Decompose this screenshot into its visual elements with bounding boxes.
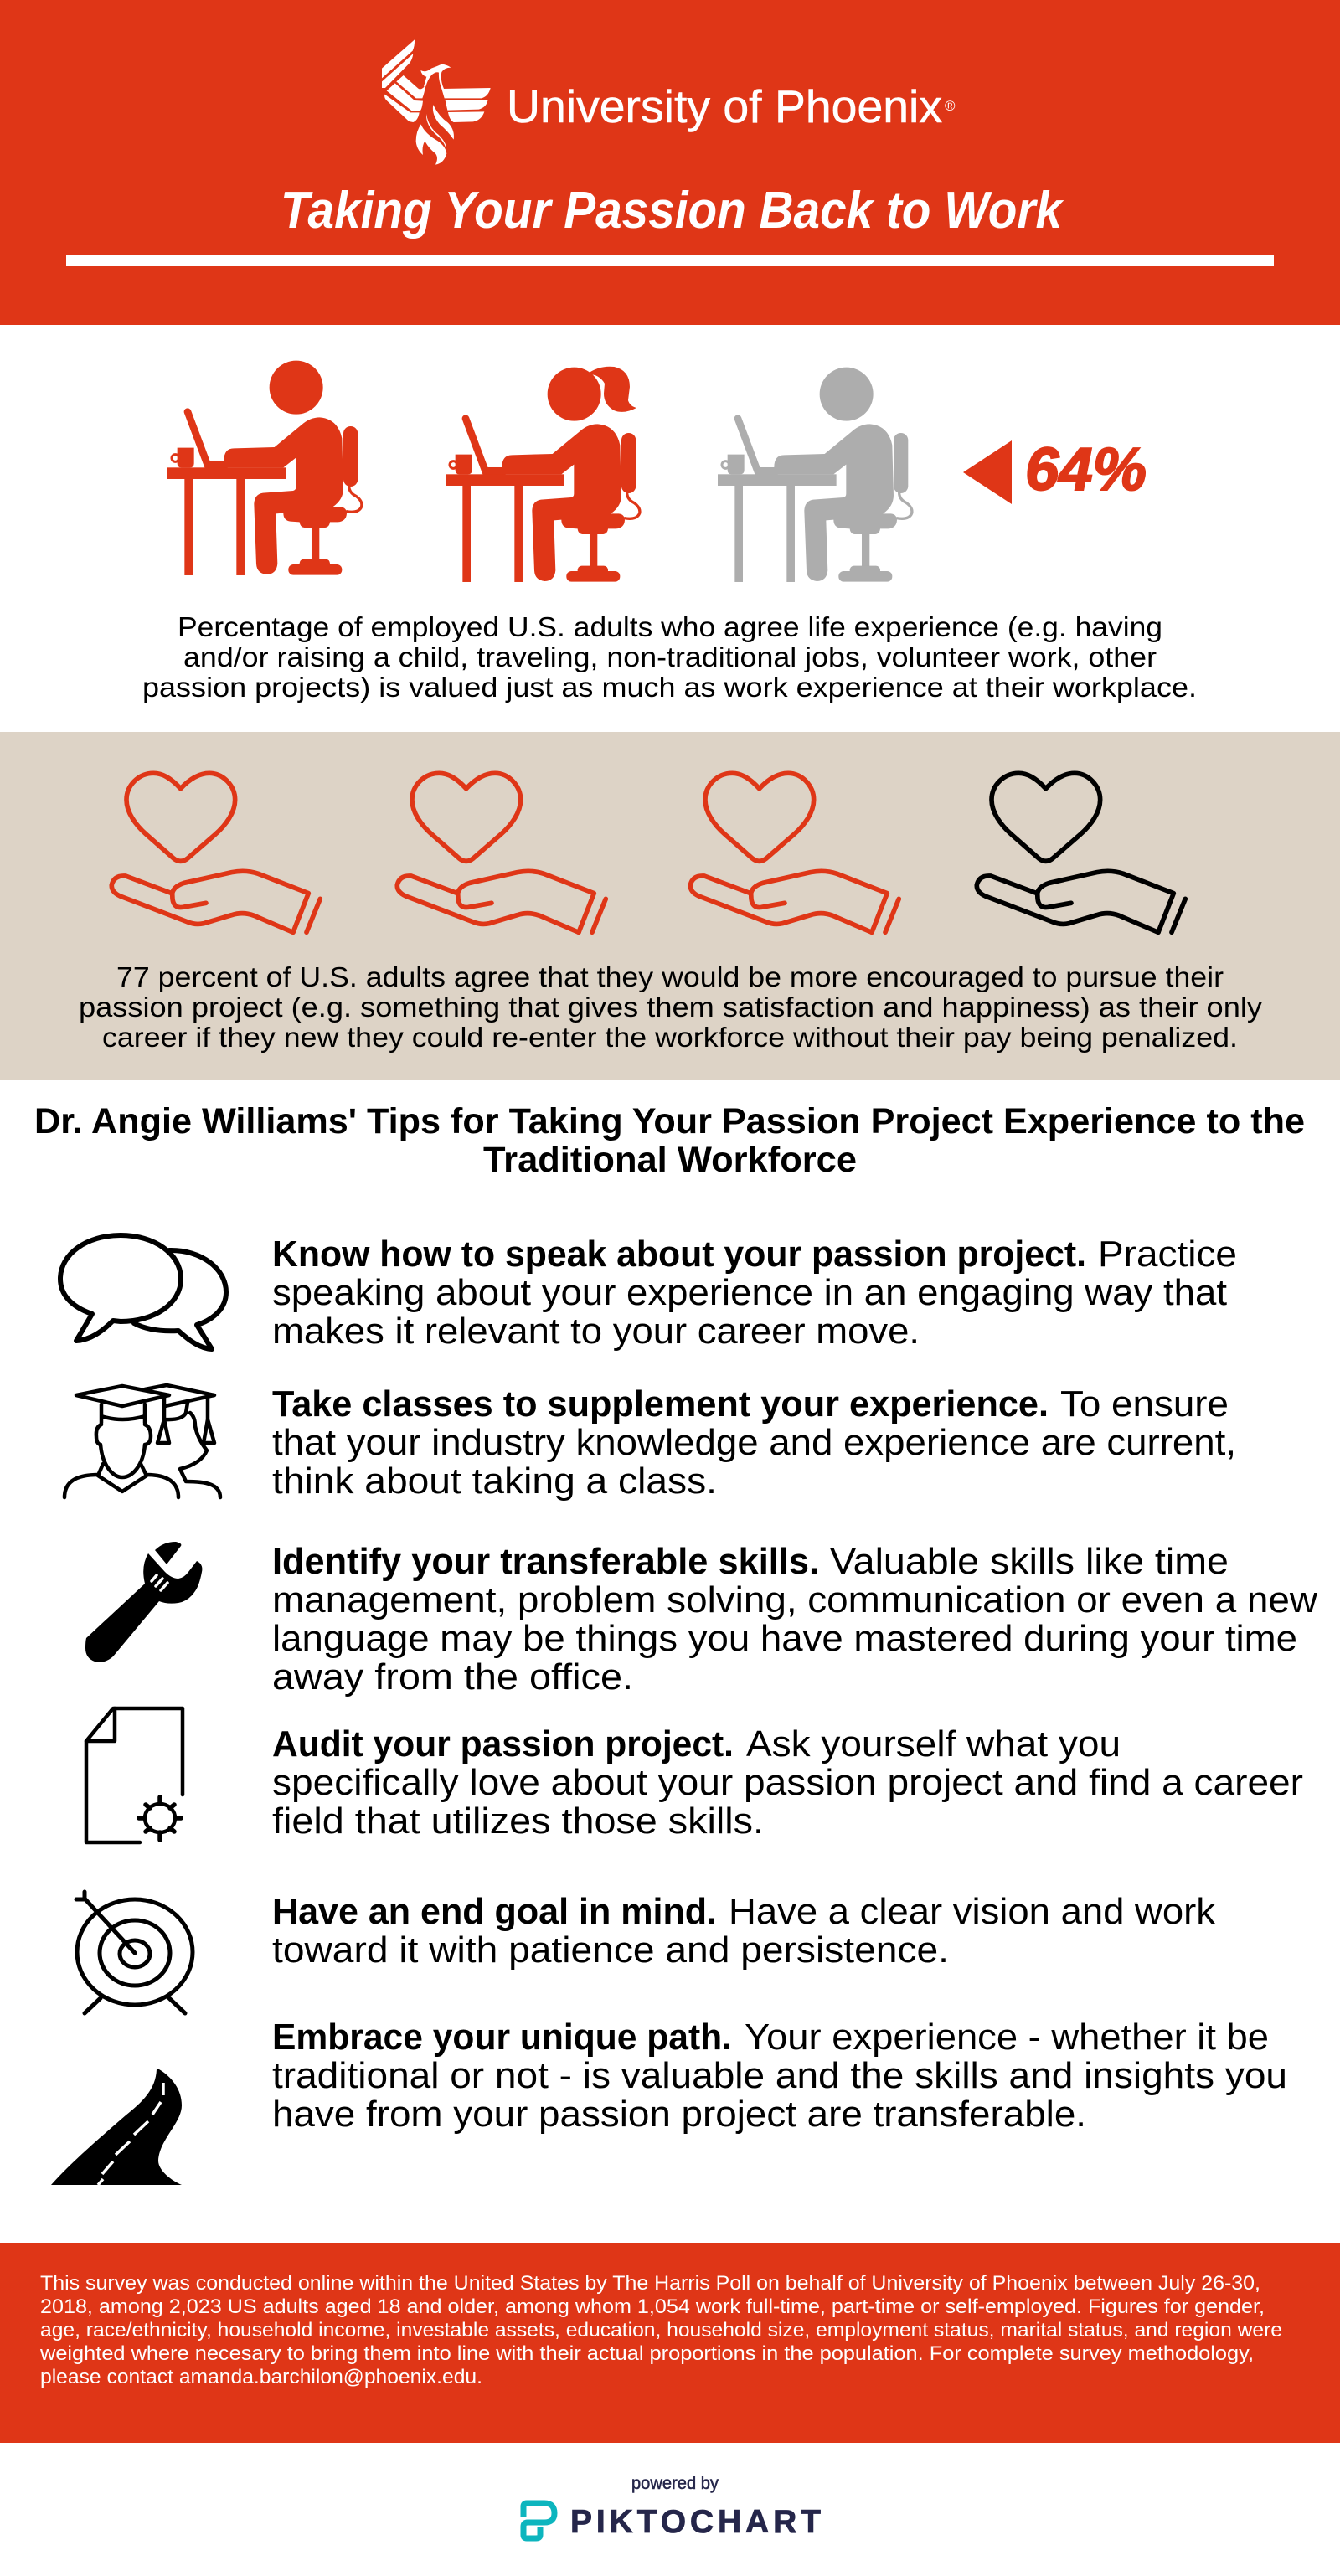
icon: heart in hand 3, red	[690, 773, 899, 932]
text: tip 2: To ensure	[1060, 1383, 1229, 1425]
text: tip 5: Have an end goal in mind.	[272, 1891, 717, 1932]
icon: heart in hand 1, red	[111, 773, 320, 932]
text: tip 4: Audit your passion project.	[272, 1723, 734, 1765]
text: methodology: 2018, among 2,023 US adults aged 18 and older, among whom 1,054 work full-time, part-time or self-employed. Figures for gender,	[40, 2295, 1265, 2318]
panel: 77 percent statistic	[0, 732, 1340, 1080]
text: powered by: powered by	[631, 2474, 719, 2493]
panel: survey methodology footer	[0, 2243, 1340, 2443]
text: tip 6: Embrace your unique path.	[272, 2017, 732, 2058]
text: tip 1: Practice	[1098, 1234, 1237, 1275]
panel: tip 2 take classes	[64, 1383, 1236, 1502]
panel: tip 1 speak about your project	[60, 1234, 1237, 1352]
icon: person at desk, grey	[718, 368, 912, 582]
logo: wordmark: ®	[945, 98, 956, 114]
icon: document with gear	[86, 1708, 183, 1842]
text: passion project description: career if they new they could re-enter the workforce without their pay being penalized.	[102, 1023, 1238, 1054]
text: tip 3: management, problem solving, communication or even a new	[272, 1579, 1317, 1620]
text: tip 5	[272, 1891, 1216, 1971]
logo: wordmark: University of Phoenix	[507, 80, 942, 132]
heading: tips: Dr. Angie Williams' Tips for Taking Your Passion Project Experience to the	[34, 1101, 1305, 1141]
panel: header	[0, 0, 1340, 325]
text: methodology: weighted where necesary to bring them into line with their actual proportions in the population. For complete survey methodology,	[39, 2342, 1254, 2365]
text: passion project description: passion project (e.g. something that gives them satisfaction and happiness) as their only	[79, 992, 1262, 1023]
icon: wrench	[85, 1542, 202, 1662]
text: Piktochart wordmark: PIKTOCHART	[570, 2504, 821, 2540]
title: Taking Your Passion Back to Work	[281, 182, 1064, 240]
text: tip 1	[272, 1234, 1237, 1352]
text: tip 2: think about taking a class.	[272, 1461, 717, 1502]
text: tip 3: Valuable skills like time	[830, 1541, 1229, 1582]
icon: speech bubbles	[60, 1235, 226, 1349]
text: tip 4	[272, 1723, 1303, 1842]
text: tip 1: speaking about your experience in an engaging way that	[272, 1272, 1227, 1313]
text: tip 4: field that utilizes those skills.	[272, 1801, 764, 1842]
text: tip 1: makes it relevant to your career move.	[272, 1311, 920, 1352]
icon: target with arrow	[76, 1892, 193, 2013]
stat: 64%: 64%	[1025, 436, 1147, 503]
branding: powered by Piktochart	[523, 2474, 821, 2540]
text: life experience description	[142, 612, 1197, 703]
text: tip 4: Ask yourself what you	[746, 1723, 1121, 1765]
text: methodology: This survey was conducted online within the United States by The Harris Poll on behalf of University of Phoenix between July 26-30,	[40, 2272, 1260, 2295]
icon: heart in hand 4, black	[977, 773, 1185, 932]
text: tip 1: Know how to speak about your passion project.	[272, 1234, 1086, 1275]
text: tip 3	[272, 1541, 1317, 1698]
text: life experience description: passion projects) is valued just as much as work experience at their workplace.	[142, 672, 1197, 703]
text: tip 2: Take classes to supplement your experience.	[272, 1383, 1049, 1425]
heading: tips	[34, 1101, 1305, 1180]
text: tip 6: Your experience - whether it be	[745, 2017, 1269, 2058]
text: life experience description: Percentage of employed U.S. adults who agree life experience (e.g. having	[178, 612, 1162, 643]
text: tip 5: toward it with patience and persistence.	[272, 1929, 949, 1971]
text: tip 6	[272, 2017, 1287, 2135]
panel: tip 3 transferable skills	[85, 1541, 1317, 1698]
panel: 64 percent statistic	[142, 361, 1197, 703]
text: life experience description: and/or raising a child, traveling, non-traditional jobs, volunteer work, other	[183, 642, 1157, 673]
text: tip 3: away from the office.	[272, 1656, 633, 1698]
icon: heart in hand 2, red	[397, 773, 606, 932]
panel: tip 4 audit your project	[86, 1708, 1303, 1842]
text: tip 6: have from your passion project are transferable.	[272, 2094, 1086, 2135]
panel: tip 6 unique path	[51, 2017, 1287, 2185]
arrow: pointer to statistic	[963, 440, 1012, 504]
text: methodology: please contact amanda.barchilon@phoenix.edu.	[40, 2366, 482, 2388]
icon: woman at desk, red	[446, 367, 640, 582]
text: passion project description	[79, 962, 1262, 1054]
heading: tips: Traditional Workforce	[483, 1140, 857, 1180]
text: tip 3: Identify your transferable skills.	[272, 1541, 819, 1582]
icon: graduates	[64, 1385, 220, 1497]
icon: Piktochart logo	[523, 2503, 554, 2538]
text: tip 5: Have a clear vision and work	[729, 1891, 1216, 1932]
text: passion project description: 77 percent of U.S. adults agree that they would be more encouraged to pursue their	[116, 962, 1224, 993]
panel: tip 5 end goal	[76, 1891, 1216, 2013]
text: methodology	[39, 2272, 1282, 2388]
text: tip 3: language may be things you have mastered during your time	[272, 1618, 1297, 1659]
text: methodology: age, race/ethnicity, household income, investable assets, education, household size, employment status, marital status, and region were	[40, 2319, 1282, 2342]
logo: phoenix emblem	[382, 39, 491, 165]
icon: winding road	[51, 2069, 182, 2185]
text: tip 2: that your industry knowledge and experience are current,	[272, 1422, 1236, 1463]
text: tip 4: specifically love about your passion project and find a career	[272, 1762, 1303, 1803]
icon: person at desk, red	[168, 361, 362, 575]
text: tip 2	[272, 1383, 1236, 1502]
text: tip 6: traditional or not - is valuable and the skills and insights you	[272, 2055, 1287, 2096]
